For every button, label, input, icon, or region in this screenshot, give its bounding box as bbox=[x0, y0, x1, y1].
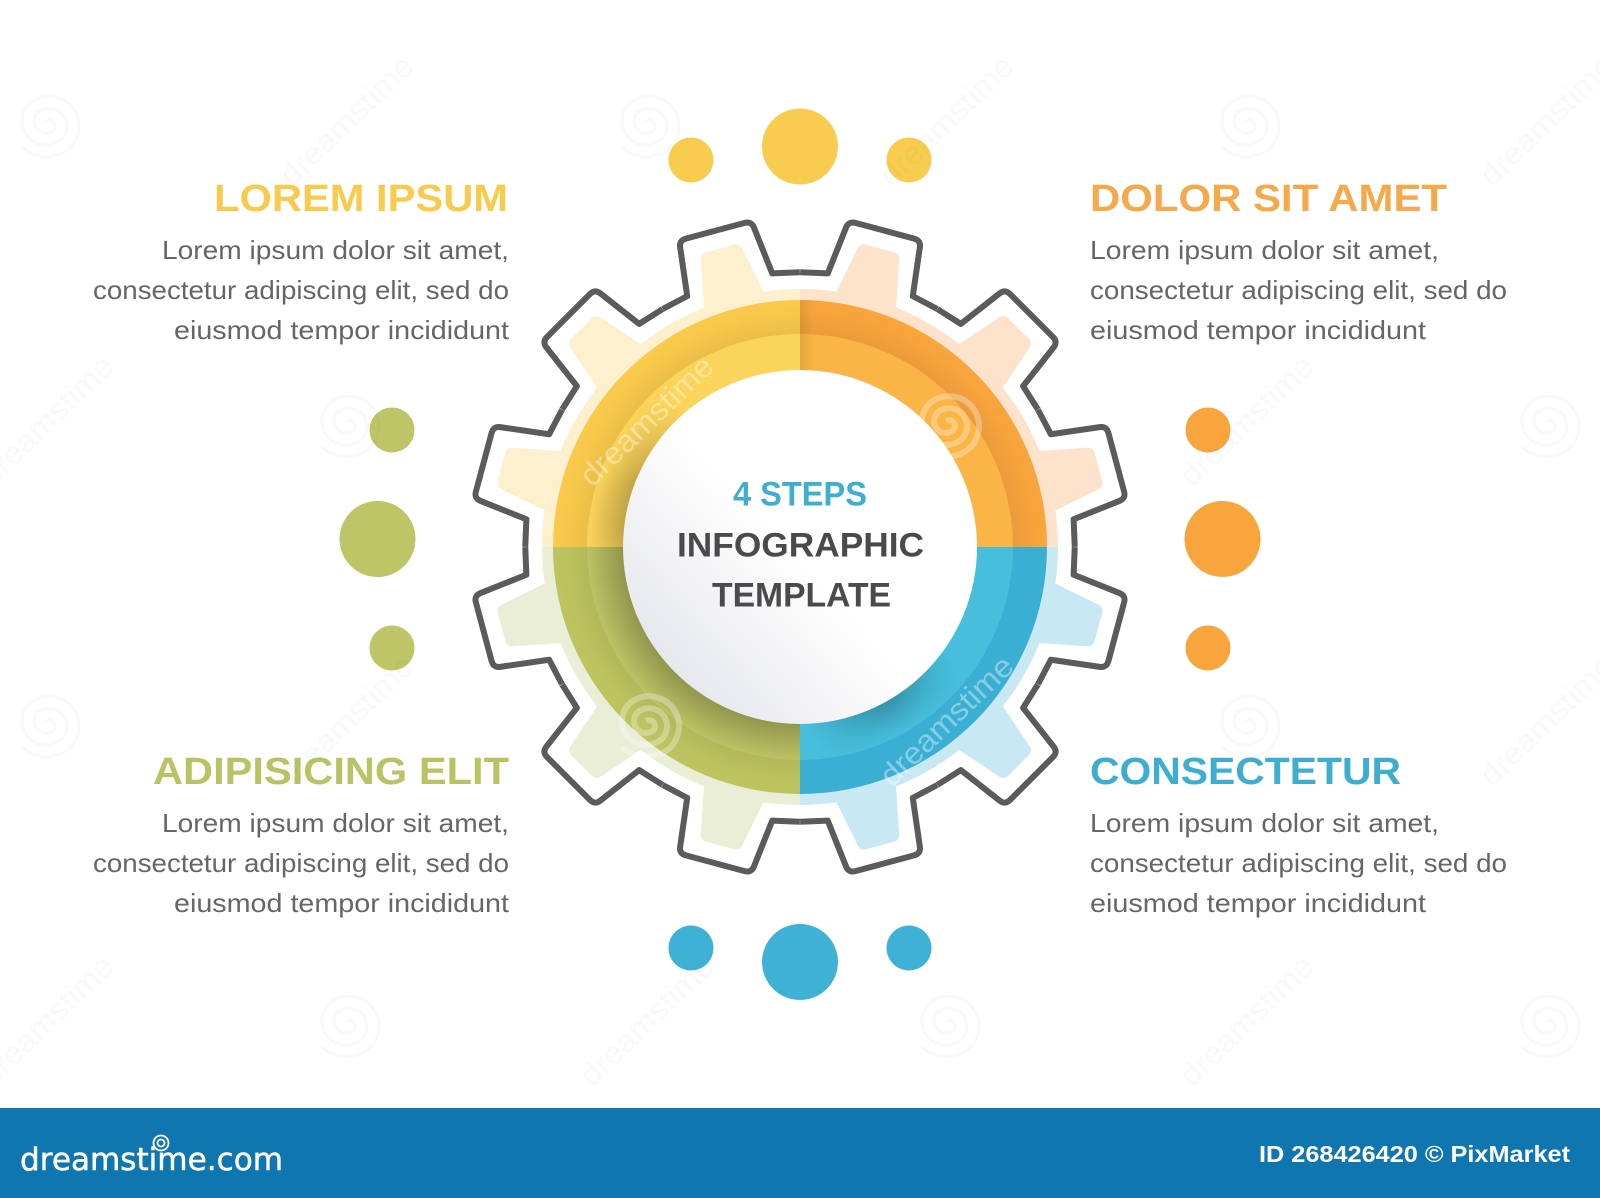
text block: consectetur: CONSECTETUR bbox=[1090, 751, 1401, 793]
text block: lorem ipsum: consectetur adipiscing elit, sed do bbox=[93, 275, 509, 305]
template: TEMPLATE bbox=[712, 576, 891, 614]
text block: lorem ipsum: eiusmod tempor incididunt bbox=[174, 315, 510, 345]
dots: blue bbox=[668, 924, 932, 1000]
text block: dolor sit amet: consectetur adipiscing elit, sed do bbox=[1090, 275, 1507, 305]
dots: yellow bbox=[668, 108, 932, 184]
text block: dolor sit amet: Lorem ipsum dolor sit amet, bbox=[1090, 235, 1439, 265]
text block: consectetur: eiusmod tempor incididunt bbox=[1090, 888, 1427, 918]
text block: consectetur: Lorem ipsum dolor sit amet, bbox=[1090, 808, 1439, 838]
text block: dolor sit amet: eiusmod tempor incididunt bbox=[1090, 315, 1427, 345]
pale teeth: yellow bbox=[493, 240, 800, 547]
text block: consectetur: consectetur adipiscing elit, sed do bbox=[1090, 848, 1507, 878]
text block: lorem ipsum: LOREM IPSUM bbox=[214, 178, 508, 220]
watermark text: dreamstime bbox=[573, 348, 721, 493]
ring segment: yellow bbox=[553, 300, 800, 547]
watermark text: dreamstime bbox=[873, 48, 1021, 193]
watermark text: dreamstime bbox=[573, 948, 721, 1093]
dots: green bbox=[340, 408, 416, 670]
text block: adipisicing elit: eiusmod tempor incididunt bbox=[174, 888, 510, 918]
text block: adipisicing elit: ADIPISICING ELIT bbox=[153, 751, 509, 793]
watermark text: dreamstime bbox=[273, 48, 421, 193]
center title bbox=[677, 476, 924, 614]
text block: adipisicing elit: Lorem ipsum dolor sit amet, bbox=[162, 808, 509, 838]
text block: dolor sit amet: DOLOR SIT AMET bbox=[1090, 178, 1447, 220]
gear outline bbox=[465, 212, 1135, 882]
footer credit: ID 268426420 © PixMarket bbox=[1259, 1141, 1570, 1167]
footer logo: dreamstime.com bbox=[20, 1142, 283, 1178]
watermark text: dreamstime bbox=[1173, 948, 1321, 1093]
infographic: INFOGRAPHIC bbox=[677, 526, 924, 564]
pale teeth: blue bbox=[800, 547, 1107, 854]
watermark text: dreamstime bbox=[1173, 348, 1321, 493]
ring segment: blue bbox=[800, 547, 1047, 794]
text block: consectetur bbox=[1090, 751, 1507, 918]
footer bar bbox=[0, 1108, 1600, 1198]
watermark text: dreamstime bbox=[873, 648, 1021, 793]
text block: dolor sit amet bbox=[1090, 178, 1507, 345]
watermark text: dreamstime bbox=[273, 648, 421, 793]
4 steps: 4 STEPS bbox=[733, 476, 867, 514]
ring segment: orange bbox=[800, 300, 1047, 547]
pale teeth: green bbox=[493, 547, 800, 854]
text block: lorem ipsum: Lorem ipsum dolor sit amet, bbox=[162, 235, 509, 265]
dots: orange bbox=[1184, 408, 1260, 670]
gear infographic bbox=[465, 212, 1135, 882]
text block: adipisicing elit bbox=[93, 751, 510, 918]
center disc bbox=[623, 370, 977, 724]
text block: adipisicing elit: consectetur adipiscing elit, sed do bbox=[93, 848, 509, 878]
pale teeth: orange bbox=[800, 240, 1107, 547]
ring segment: green bbox=[553, 547, 800, 794]
text block: lorem ipsum bbox=[93, 178, 510, 345]
